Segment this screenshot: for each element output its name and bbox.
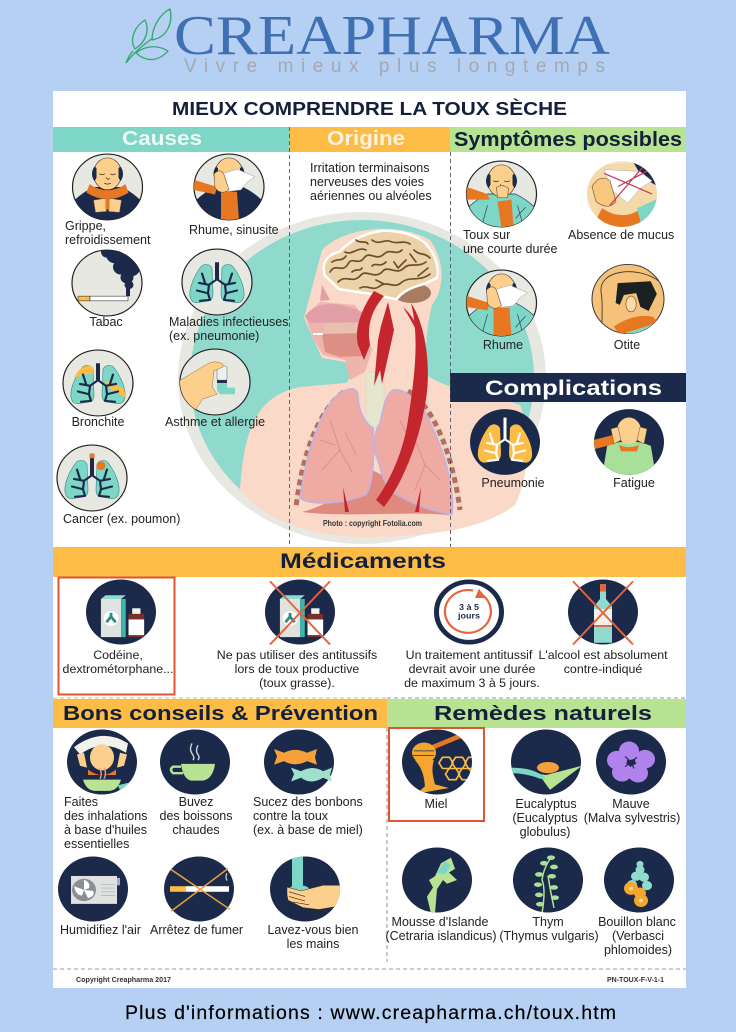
- header: Symptômes possibles: Symptômes possibles: [454, 129, 682, 151]
- ribs: [296, 391, 460, 510]
- item: Rhume: [466, 270, 538, 352]
- item: Grippe: [65, 154, 151, 247]
- item: Eucalyptus: [510, 729, 582, 839]
- item: Rhume, sinusite: Rhume, sinusite: [189, 223, 279, 237]
- item: Mousse d'Islande: [385, 847, 497, 943]
- outer ring and teal disc: [178, 212, 546, 544]
- item: Eucalyptus: globulus): [520, 825, 570, 839]
- brain: [325, 232, 436, 303]
- item: Asthme et allergie: Asthme et allergie: [165, 415, 265, 429]
- icon: honey: [402, 729, 479, 795]
- item: Bronchite: Bronchite: [72, 415, 124, 429]
- item: lavez-vous les mains: Lavez-vous bien: [267, 923, 359, 937]
- text block: origine: Irritation terminaisons: [310, 161, 430, 175]
- item: lavez-vous les mains: [267, 856, 359, 951]
- item: traitement 3 à 5 jours: Un traitement antitussif: [406, 648, 533, 662]
- item: Bronchite: [63, 350, 133, 429]
- header: Causes: [53, 127, 289, 152]
- footer: reference code: PN-TOUX-F-V-1-1: [607, 977, 664, 984]
- item: Ne pas utiliser: [217, 579, 377, 690]
- item: Miel: Miel: [425, 797, 447, 811]
- item: inhalations: Faites: [64, 795, 98, 809]
- item: Otite: [592, 264, 665, 352]
- item: Absence de mucus: Absence de mucus: [568, 228, 674, 242]
- item: humidifiez l'air: Humidifiez l'air: [60, 923, 141, 937]
- item: humidifiez l'air: [58, 856, 141, 937]
- panel: complications: [450, 373, 686, 490]
- item: Ne pas utiliser: lors de toux productive: [235, 662, 359, 676]
- header: Médicaments: [53, 547, 686, 577]
- item: traitement 3 à 5 jours: [404, 582, 540, 690]
- item: alcool: L'alcool est absolument: [538, 648, 668, 662]
- icon: medicine box: [86, 579, 156, 645]
- text block: origine: [310, 161, 432, 203]
- text block: origine: nerveuses des voies: [310, 175, 424, 189]
- item: boissons chaudes: des boissons: [160, 809, 232, 823]
- item: Mousse d'Islande: (Cetraria islandicus): [385, 929, 497, 943]
- peach body silhouette: [240, 229, 528, 537]
- item: alcool: contre-indiqué: [564, 662, 642, 676]
- item: Otite: Otite: [614, 338, 640, 352]
- item: lavez-vous les mains: les mains: [287, 937, 339, 951]
- section headers row: [53, 127, 686, 152]
- item: bonbons: [253, 729, 363, 837]
- panel: symptômes possibles: [463, 160, 674, 352]
- header: Complications: [450, 373, 686, 402]
- item: bonbons: (ex. à base de miel): [253, 823, 363, 837]
- item: Bouillon blanc: phlomoides): [604, 943, 672, 957]
- item: Tabac: [72, 246, 142, 329]
- item: arrêtez de fumer: [150, 856, 243, 937]
- item: Rhume, sinusite: [189, 154, 279, 237]
- item: bonbons: Sucez des bonbons: [253, 795, 363, 809]
- item: Toux sur une courte durée: [463, 161, 558, 256]
- item: Mauve: (Malva sylvestris): [584, 811, 680, 825]
- lung veins: [320, 420, 440, 490]
- item: Mousse d'Islande: Mousse d'Islande: [392, 915, 488, 929]
- header: Bons conseils & Prévention: [53, 699, 387, 728]
- item: Mauve: [584, 729, 680, 825]
- divider lines: [53, 127, 686, 969]
- item: inhalations: essentielles: [64, 837, 129, 851]
- footer link: Plus d'informations : www.creapharma.ch/toux.htm: [125, 1002, 616, 1024]
- icon: leaf sprig: [126, 9, 171, 63]
- item: boissons chaudes: Buvez: [179, 795, 213, 809]
- item: Toux sur une courte durée: une courte durée: [463, 242, 558, 256]
- item: inhalations: des inhalations: [64, 809, 147, 823]
- item: Eucalyptus: (Eucalyptus: [512, 811, 578, 825]
- panel: causes: [57, 154, 289, 526]
- item: traitement 3 à 5 jours: de maximum 3 à 5 jours.: [404, 676, 540, 690]
- item: Rhume: Rhume: [483, 338, 523, 352]
- panel: remèdes naturels: [385, 699, 686, 957]
- item: traitement 3 à 5 jours: 3 à 5: [459, 602, 479, 612]
- item: Bouillon blanc: Bouillon blanc: [598, 915, 676, 929]
- item: Maladies infectieuses: (ex. pneumonie): [169, 329, 259, 343]
- item: Codéine: [58, 578, 174, 694]
- item: Codéine: Codéine,: [93, 648, 143, 662]
- panel: bons conseils et prévention: [53, 699, 387, 951]
- logo: Creapharma: [126, 5, 611, 77]
- logo wordmark: CREAPHARMA: [174, 5, 611, 67]
- highlight box: [389, 728, 484, 821]
- header: Remèdes naturels: Remèdes naturels: [434, 703, 652, 725]
- item: Absence de mucus: [568, 160, 674, 242]
- diaphragm: [302, 470, 454, 516]
- item: Asthme et allergie: [165, 349, 265, 429]
- header: Bons conseils & Prévention: Bons conseils & Prévention: [63, 703, 378, 725]
- footer: copyright: Copyright Creapharma 2017: [76, 975, 171, 984]
- item: bonbons: contre la toux: [253, 809, 329, 823]
- tagline: Vivre mieux plus longtemps: [184, 56, 605, 77]
- item: boissons chaudes: [160, 729, 232, 837]
- item: Grippe: Grippe,: [65, 219, 106, 233]
- item: Thym: (Thymus vulgaris): [499, 929, 599, 943]
- header: Origine: [289, 127, 450, 152]
- main white panel: [53, 91, 686, 988]
- item: alcool: [538, 579, 668, 676]
- item: Ne pas utiliser: (toux grasse).: [259, 676, 335, 690]
- item: boissons chaudes: chaudes: [172, 823, 220, 837]
- nerve arrows: [343, 291, 428, 512]
- text block: origine: aériennes ou alvéoles: [310, 189, 432, 203]
- highlight box: [58, 578, 174, 694]
- item: Codéine: dextrométorphane...: [63, 662, 173, 676]
- item: Ne pas utiliser: Ne pas utiliser des antitussifs: [217, 648, 377, 662]
- item: Pneumonie: [470, 409, 545, 490]
- item: inhalations: à base d'huiles: [64, 823, 147, 837]
- photo credit: Photo : copyright Fotolia.com: [323, 519, 422, 528]
- illustration: respiratory system and cough reflex: [178, 212, 546, 544]
- head interior: [305, 285, 372, 380]
- item: Cancer: [57, 445, 180, 526]
- item: inhalations: [64, 729, 147, 851]
- header: Causes: Causes: [122, 128, 202, 150]
- item: Fatigue: [593, 409, 664, 490]
- item: traitement 3 à 5 jours: jours: [457, 611, 480, 620]
- header: Médicaments: Médicaments: [280, 550, 446, 573]
- item: Maladies infectieuses: [169, 249, 289, 343]
- item: Thym: [499, 847, 599, 943]
- item: Eucalyptus: Eucalyptus: [515, 797, 577, 811]
- trachea: [366, 372, 384, 427]
- item: Grippe: refroidissement: [65, 233, 151, 247]
- item: traitement 3 à 5 jours: devrait avoir une durée: [409, 662, 535, 676]
- item: Tabac: Tabac: [89, 315, 123, 329]
- item: Toux sur une courte durée: Toux sur: [463, 228, 510, 242]
- item: Pneumonie: Pneumonie: [481, 476, 545, 490]
- item: arrêtez de fumer: Arrêtez de fumer: [150, 923, 243, 937]
- header: Remèdes naturels: [387, 699, 686, 728]
- header: Complications: Complications: [485, 377, 662, 400]
- item: Mauve: Mauve: [612, 797, 650, 811]
- header: Origine: Origine: [327, 128, 405, 150]
- title: MIEUX COMPRENDRE LA TOUX SÈCHE: [172, 98, 567, 119]
- item: Maladies infectieuses: Maladies infectieuses: [169, 315, 289, 329]
- item: Cancer: Cancer (ex. poumon): [63, 512, 180, 526]
- item: Fatigue: Fatigue: [613, 476, 655, 490]
- item: Bouillon blanc: [598, 847, 676, 957]
- item: Thym: Thym: [532, 915, 564, 929]
- panel: médicaments: [53, 547, 686, 694]
- lungs: [300, 389, 452, 514]
- item: Miel: [389, 728, 484, 821]
- item: Bouillon blanc: (Verbasci: [612, 929, 664, 943]
